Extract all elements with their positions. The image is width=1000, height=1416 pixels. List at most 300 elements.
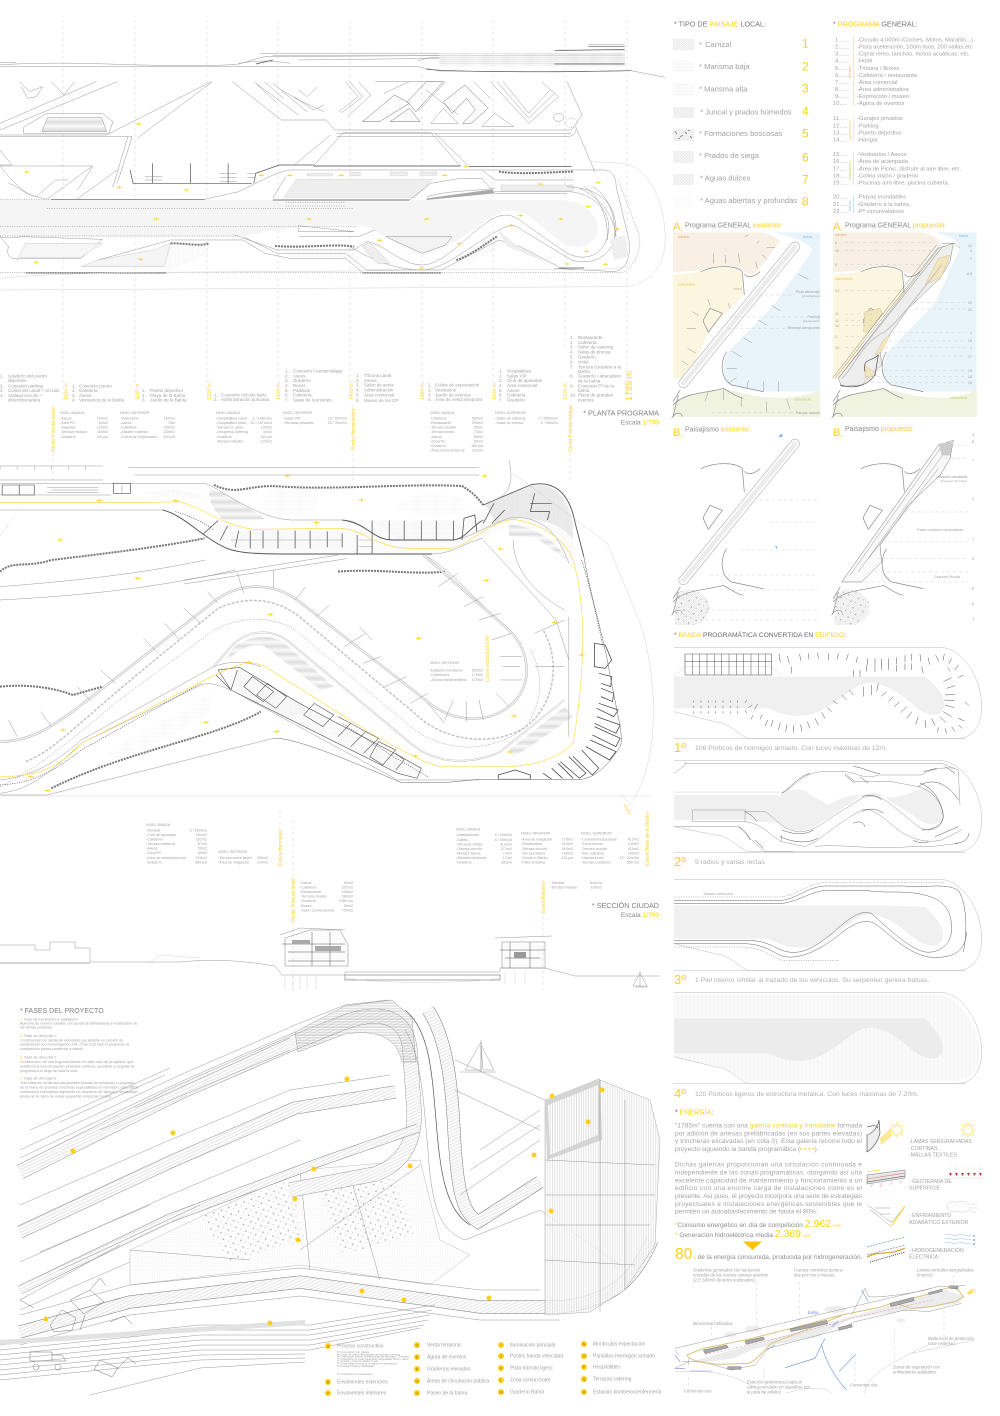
step 2 drawing — [674, 761, 982, 852]
table nivel inferior 5 — [521, 832, 573, 864]
table nivel banda 1: -Área PC — [60, 421, 76, 425]
energy paragraph: excelente capacidad de mantenimiento y funcionamiento a un — [675, 1178, 862, 1184]
table nivel banda 4: -Aseos — [146, 847, 158, 851]
programme items: -Vestuarios / Aseos — [857, 152, 907, 158]
list km 1000: Graderío del puerto — [8, 374, 48, 378]
table nivel banda 2: -Hospitalities pista — [216, 421, 247, 425]
legend column 3: Postes banda velocidad — [510, 1354, 563, 1360]
programme numbers: 8....... — [835, 87, 850, 93]
phases list: 4. Fase de obra ligera: — [20, 1077, 57, 1081]
energy paragraph — [675, 1122, 863, 1216]
table nivel banda 1: -Graderío — [60, 435, 76, 439]
list km 1100 — [135, 384, 187, 402]
step 3 caption — [674, 972, 929, 987]
list km 1400: 1400 m — [349, 383, 355, 400]
A2 labels: 17 — [968, 355, 972, 359]
A1 labels: suburbano — [678, 282, 695, 286]
A2 labels: bahía — [959, 234, 969, 238]
outer edges — [0, 473, 653, 807]
programme numbers: 15..... — [833, 152, 848, 158]
list km 1000: Colina del canal + circuito — [8, 388, 60, 393]
A1 heading: A — [673, 221, 681, 233]
yellow arrow — [743, 1242, 762, 1250]
legend column 3: Graderío Bahía — [510, 1390, 544, 1396]
table nivel banda 5: 273m2 — [501, 847, 512, 851]
legend column 3: J — [500, 1354, 502, 1358]
programme items: -Parking — [857, 124, 879, 130]
programme numbers: 12..... — [833, 124, 848, 130]
B2 labels: Cinturón Pluvial — [934, 575, 960, 579]
B2 labels: (línea con dip hiker) — [941, 479, 967, 483]
energy paragraph: presente. Así pues, el proyecto incorpora una serie de estrategias — [675, 1193, 863, 1200]
list km 1700: 8. — [570, 374, 574, 378]
B2 labels — [917, 432, 975, 621]
table nivel banda 3: -Terraza bahía — [430, 430, 455, 434]
legend column 1: A — [327, 1344, 330, 1348]
list km 1600: Área comercial — [507, 382, 537, 388]
step 1 drawing — [674, 647, 982, 738]
table tribuna sport: 50m2 — [344, 904, 353, 908]
list km 1700: Restaurante — [578, 335, 603, 340]
right end cells — [498, 643, 620, 779]
energy section — [675, 1108, 984, 1263]
list km 1500: 3. — [428, 392, 432, 398]
list km 1400: Museo de los GP — [364, 398, 399, 403]
table nivel inferior 1: -Vestuarios — [120, 416, 139, 420]
80 percent: 80% de la energía consumida, producida por hidrogeneración. — [675, 1246, 863, 1263]
strategy labels: ADIABÁTICO EXTERIOR — [909, 1219, 969, 1226]
table nivel inferior 1: 200m2 — [164, 426, 175, 430]
panel B1 existing landscape — [672, 426, 817, 625]
legend column 2: Graderíos elevados — [427, 1366, 471, 1372]
list km 1600: 6. — [499, 392, 503, 398]
table nivel inferior 5: 196m2 — [562, 851, 573, 855]
landscape labels: * Aguas dulces — [700, 174, 750, 182]
table nivel banda 5: -Graderío — [456, 860, 472, 864]
site plan labels: Graderíos generados con las tierras — [693, 1268, 760, 1272]
table nivel banda 2: 40m2 — [263, 430, 272, 434]
list km 1600: Club de apuestas — [507, 378, 543, 383]
bottom stripes and track — [0, 1305, 435, 1395]
legend column 2: F — [416, 1366, 419, 1372]
list km 1400: 1. — [356, 373, 360, 378]
panel A2 proposed programme — [832, 221, 977, 418]
table nivel banda 5: 9 / 33m2/u — [495, 833, 512, 837]
programme items: -Canal remo, lanchas, motos acuáticas, etc. — [857, 52, 970, 58]
ribbon lower — [20, 1240, 652, 1345]
table nivel banda 3: 132m2 — [472, 449, 483, 453]
table nivel banda 2: -Terraza mirador — [216, 439, 244, 443]
energy paragraph: "1785m" cuenta con una galería continua y transitable formada — [675, 1122, 862, 1130]
table nivel superior 3: 2 / 45m2/u — [541, 421, 558, 425]
table nivel banda 5: -Terrazas Suites — [456, 842, 483, 846]
phases list: las tierras extraídas. — [20, 1026, 53, 1030]
zone names vertical lower: Curva Hotel de la Bahía — [645, 813, 651, 866]
programme items: -Tribuna / Boxes — [857, 66, 899, 72]
band step 3 skin — [674, 879, 982, 987]
A2 labels: 15 — [835, 346, 839, 350]
list km 1700: Graderío — [578, 354, 596, 360]
landscape numbers: 3 — [802, 82, 809, 96]
list km 1700: Salas de prensa — [578, 350, 611, 354]
legend column 3: L — [500, 1378, 503, 1382]
legend column 4: Q — [582, 1376, 586, 1382]
callout markers — [44, 1076, 604, 1326]
list km 1000 second: 1. — [72, 384, 76, 388]
table nivel banda 5: -Mirador Bahía — [456, 851, 481, 855]
B1 heading: 1 — [680, 433, 683, 438]
list km 1100: Puerto deportivo — [150, 388, 184, 393]
table nivel inferior 5: -Pista la Bahía — [521, 860, 546, 864]
table nivel banda 4: 261m2 — [196, 838, 207, 842]
A1 labels — [678, 235, 820, 415]
table nivel banda 5: 322pw — [501, 860, 512, 864]
elevation strip — [0, 45, 665, 77]
list km 1300: 1300 m — [276, 383, 282, 400]
landscape labels: * Formaciones boscosas — [699, 129, 782, 138]
table nivel inferior 1: NIVEL INFERIOR — [120, 411, 149, 415]
track curves — [0, 170, 629, 272]
table nivel banda 5: -Almacén limpieza — [456, 856, 487, 860]
city blocks — [0, 82, 582, 138]
landscape numbers: 5 — [802, 126, 809, 140]
list km 1000 second: 1000 m — [64, 383, 70, 400]
legend column 1: C — [327, 1390, 330, 1396]
legend column 1: Pº Colocación de losas alveolares alogedadas 35cm+ carpa — [337, 1357, 409, 1361]
step 3 drawing — [674, 879, 982, 970]
A2 labels: 19 — [968, 369, 972, 373]
table nivel banda 4 — [146, 823, 207, 864]
legend column 1: Pº Colocación de envolventes — [337, 1372, 373, 1376]
A1 labels: Parque natural — [796, 411, 820, 415]
B2 labels: 3 — [972, 556, 975, 561]
strategy labels: - GEOTERMIA DE — [909, 1179, 952, 1185]
programme numbers: 3....... — [835, 52, 850, 58]
table nivel banda 4: NIVEL BANDA — [146, 823, 171, 827]
table curva bahaira — [550, 881, 602, 890]
table nivel inferior 2: -Salas VIP — [283, 416, 301, 420]
ribbon descending — [405, 1010, 620, 1265]
vehicle trace label: Trazado vehículos — [703, 892, 733, 896]
step 4 caption: 120 Pórticos ligeros de estructura metálica. Con luces máximas de 7.20m. — [695, 1091, 919, 1098]
list km 1000 second: 4. — [72, 398, 76, 402]
legend column 1: Pº Cimentación por pilotaje — [337, 1350, 370, 1354]
table nivel banda 5: 73m2 — [503, 851, 512, 855]
programme numbers: 5....... — [835, 66, 850, 72]
icon: evaporative cooling — [868, 1201, 978, 1226]
landscape numbers: 1 — [802, 36, 809, 50]
level markers — [28, 474, 585, 792]
loop programme table: 620m2 — [472, 668, 483, 672]
table nivel banda 4: 218m2 — [196, 856, 207, 860]
list km 1400: 6. — [356, 398, 360, 403]
table nivel superior 3: -Salas de prensa — [495, 421, 524, 425]
total length 1785 m: 1785 m — [624, 371, 634, 401]
landscape labels — [699, 40, 797, 205]
legend column 3: K — [500, 1366, 503, 1370]
B1 heading: Paisajismo — [685, 426, 721, 434]
A2 heading: propuesto: — [913, 222, 946, 230]
energy paragraph: independiente de las zonas programáticas, otorgando así una — [675, 1170, 862, 1176]
list km 1700 — [563, 335, 622, 402]
plan: top site plan — [0, 45, 665, 290]
energy paragraph: proyecto siguiendo la banda programática (▪ ▪ ▪ ▪). — [675, 1146, 819, 1153]
A2 labels: 14 — [835, 324, 839, 328]
table curva bahaira: 160m2 — [591, 886, 602, 890]
A2 heading: Programa GENERAL — [845, 222, 913, 230]
table nivel banda 5: NIVEL BANDA — [456, 828, 481, 832]
table nivel banda 5: -Galería circuito — [456, 847, 482, 851]
list km 1500: 2. — [428, 388, 432, 392]
table nivel superior 5: NIVEL SUPERIOR — [581, 832, 612, 836]
B2 labels: 1 — [972, 616, 975, 621]
list km 1400: 5. — [356, 392, 360, 398]
upper programme band — [130, 483, 584, 563]
A2 labels: naturaleza — [950, 396, 968, 400]
B2 heading: 2 — [840, 433, 843, 438]
list km 1000 second: Aseos — [79, 393, 92, 398]
list km 1700: 10. — [570, 392, 576, 398]
B2 map — [832, 440, 968, 615]
list km 1300: Aseos — [293, 374, 306, 378]
programme heading: * PROGRAMA GENERAL: — [833, 20, 918, 28]
programme items: -Área de Picnic, disfrute al aire libre, etc. — [857, 165, 961, 172]
step 2 caption — [674, 854, 765, 869]
A2 heading: A — [833, 221, 841, 233]
B1 vegetation — [675, 500, 817, 625]
list km 1000 second: 2. — [72, 388, 76, 393]
program area tables upper — [51, 405, 574, 453]
building section left — [280, 928, 348, 966]
list km 1600: 5. — [499, 388, 503, 393]
site plan labels: Minicentral hidráulica — [693, 1321, 733, 1326]
table tribuna sport — [300, 881, 353, 912]
step 4 caption — [674, 1086, 919, 1101]
table nivel banda 3: -Graderío — [430, 444, 446, 448]
table nivel superior 3: 2 / 350m2/u — [539, 416, 558, 420]
table nivel banda 1 — [60, 411, 108, 439]
list km 1300: 6. — [285, 392, 289, 398]
table nivel banda 2: 6 / 168m2/u — [253, 416, 272, 420]
legend column 1: Pº Colocación artesas prefabricadas de hormigón. Cimbrado — [337, 1355, 410, 1359]
A2 labels — [835, 233, 972, 400]
right tower facade — [545, 1078, 660, 1315]
plan: detailed programme plan — [0, 460, 653, 807]
table nivel banda 3: 200m2 — [472, 421, 483, 425]
program area tables lower — [146, 813, 651, 922]
banda heading: * BANDA PROGRAMÁTICA CONVERTIDA EN EDIFICIO: — [674, 630, 846, 639]
zone names vertical upper: Curva Fuentemálaga — [568, 405, 574, 452]
list km 1500: Vestuarios — [435, 388, 457, 392]
strategy labels: ELÉCTRICA — [909, 1254, 939, 1260]
energy paragraph: Dichas galerías proporcionan una circulación continuada e — [675, 1162, 862, 1168]
A1 heading: 1 — [680, 227, 683, 232]
phases list: competición con homologación FIA. (Tras esta fase el programa de — [20, 1043, 130, 1047]
list km 1300: 1. — [285, 368, 289, 374]
legend column 3: Iluminación principal — [510, 1342, 555, 1348]
A2 labels: 4 — [970, 249, 972, 253]
phases list: programa a lo largo de toda la vida. — [20, 1069, 78, 1073]
list km 1300: 3. — [285, 378, 289, 383]
phases list: ahora de la mano de varias pequeñas empresas locales. — [20, 1094, 113, 1098]
strategy labels: -CORTINAS — [909, 1146, 938, 1152]
list km 1000: 3. — [0, 388, 4, 393]
panel B2 proposed landscape — [832, 426, 975, 625]
zone names vertical lower: Recta Tribuna sport — [291, 878, 297, 922]
landscape type list — [673, 20, 809, 208]
table nivel banda 1: 110m2 — [97, 430, 108, 434]
list km 1000 second: 3. — [72, 393, 76, 398]
loop programme table: Curva velocidad 180º — [485, 634, 491, 682]
legend column 1: Pº Losas de pilas prefabricadas de hormigón armado — [337, 1352, 401, 1356]
table nivel inferior 4: 130m2 — [257, 860, 268, 864]
table tribuna sport: -Aseos — [300, 881, 312, 885]
building section right — [495, 936, 552, 968]
sailboat in section — [633, 971, 648, 987]
list km 1700: 2. — [570, 340, 574, 345]
table nivel inferior 1: -Alquiler material — [120, 430, 148, 434]
list km 1100: 3. — [142, 398, 146, 402]
list km 1000 second: Vestuarios de la Bahía — [79, 398, 125, 402]
site plan labels: Lamas verticales serigrafiadas — [917, 1268, 974, 1272]
table nivel inferior 5: 175m2 — [562, 838, 573, 842]
table nivel banda 4: 560 pw — [195, 860, 207, 864]
band step 2 radii — [674, 761, 982, 869]
legend column 3: I — [500, 1342, 502, 1348]
site plan labels: Corrientes ríos — [850, 1382, 877, 1388]
energy paragraph: permiten un autoabastecimiento de hasta el 80%: — [675, 1209, 818, 1216]
programme items: -Área administrativa — [857, 86, 909, 93]
phases list: 1. Fase de excavación y paisajismo: — [20, 1018, 79, 1022]
table nivel banda 3: -Cafetería — [430, 416, 447, 420]
list km 1000: 4. — [0, 393, 4, 398]
landscape labels: * Prados de siega — [699, 151, 760, 160]
list km 1300: Graderío — [293, 378, 311, 383]
category bars: naturaleza — [847, 161, 852, 180]
step 2 caption: 5 radios y varias rectas — [695, 859, 765, 866]
radial ticks — [9, 570, 565, 737]
list km 1700: Hotel — [578, 360, 589, 364]
list km 1600: 1600 m — [492, 383, 498, 400]
table nivel banda 4: 3 / 65m2/u — [190, 828, 207, 832]
list km 1300: 2. — [285, 374, 289, 378]
list km 1700: Bahía — [578, 369, 590, 374]
landscape numbers: 8 — [802, 194, 809, 208]
list km 1700: de la bahía — [578, 378, 601, 384]
strategy labels: -LAMAS SERIGRAFIADAS — [909, 1139, 972, 1145]
table nivel banda 3: -Terraza circuito — [430, 426, 456, 430]
yellow circulation axis — [0, 502, 583, 777]
A2 labels: 20 — [968, 301, 972, 305]
lower parcels — [17, 228, 629, 267]
step 3 caption: 1 Piel interior similar al trazado de los vehículos. Su serpenteo genera bolsas. — [695, 977, 929, 984]
table nivel banda 2: -Hospitalities canal — [216, 416, 247, 420]
table nivel inferior 4 — [218, 850, 268, 864]
programme numbers: 6....... — [835, 73, 850, 79]
B2 labels: Paseo continuo circuvalante — [917, 528, 963, 532]
B2 heading: B — [833, 427, 840, 439]
programme items: -Área de acampada — [857, 158, 909, 165]
A2 labels: 13 — [835, 289, 839, 293]
energy paragraph: proyectuales e instalaciones energéticas sostenibles que le — [675, 1201, 862, 1208]
table nivel banda 3: 73m2 — [474, 430, 483, 434]
zone names vertical lower: Curva Hermitaje — [278, 830, 284, 866]
energy paragraph: y trincheras excavadas (en cota 0). Esta galería recorre todo el — [675, 1138, 863, 1145]
A1 labels: bahía — [803, 235, 813, 239]
table nivel banda 3: 50m2 — [474, 439, 483, 443]
table nivel banda 3: -Restaurante — [430, 421, 451, 425]
table nivel banda 2: NIVEL BANDA — [216, 411, 241, 415]
list km 1600: 4. — [499, 383, 503, 388]
table curva bahaira: -Tiendas — [550, 881, 564, 885]
list km 1000 second — [64, 383, 125, 402]
list km 1200: 1200 m — [207, 383, 213, 400]
programme numbers: 21..... — [833, 202, 848, 208]
landscape labels: * Aguas abiertas y profundas — [700, 196, 797, 205]
step 1 caption: 106 Pórticos de hormigón armado. Con luces máximas de 12m. — [695, 745, 887, 752]
table tribuna sport: 3160 pw — [339, 899, 353, 903]
table nivel inferior 2: 16 / 30m2/u — [328, 421, 347, 425]
table nivel inferior 4: 250m2 — [257, 856, 268, 860]
legend column 3: Zona común hotel — [510, 1378, 550, 1384]
list km 1000: desembocadura — [8, 398, 41, 402]
legend column 1: Pº Capado chapa multipliegado — [337, 1364, 375, 1368]
A1 labels: (Aeropuerto) — [803, 319, 820, 323]
step 2 caption: 2º — [674, 854, 686, 869]
site plan labels: calor acumulado en superficie por — [747, 1384, 810, 1390]
sailboat — [460, 1040, 496, 1072]
list km 1200: Administración portuaria — [221, 397, 270, 402]
table nivel banda 5 — [456, 828, 512, 864]
programme numbers: 10..... — [833, 101, 848, 107]
table nivel superior 5: 415m2 — [628, 838, 639, 842]
programme numbers: 17..... — [833, 166, 848, 172]
B2 labels: Mirador inundable — [937, 475, 967, 479]
phases list: competición podría comenzar a darse). — [20, 1047, 84, 1051]
table tribuna sport: 235m2 — [342, 890, 353, 894]
programme numbers: 9....... — [835, 94, 850, 100]
table nivel inferior 2 — [283, 411, 347, 425]
isometric perspective — [0, 1000, 660, 1395]
list km 1000: 2. — [0, 384, 4, 388]
B2 labels: 2 — [972, 496, 975, 501]
legend column 4: Hospitalities — [593, 1364, 620, 1370]
list km 1400 — [349, 373, 399, 403]
programme items: -Área comercial — [857, 79, 898, 86]
A2 labels: 21 — [968, 244, 972, 248]
site plan labels: das por ríos y mareas — [794, 1272, 834, 1278]
zone names vertical upper: Recta Hospitalities — [351, 408, 357, 450]
list km 1500: 1. — [428, 382, 432, 388]
list km 1700: Salón de catering — [578, 344, 614, 350]
heading: planta programa: Escala 1/700 — [621, 420, 659, 426]
landscape numbers: 2 — [802, 60, 809, 74]
ribbon back — [20, 1000, 414, 1190]
phases text — [20, 1008, 140, 1098]
heading: seccion ciudad: Escala 1/700 — [621, 912, 659, 919]
site plan labels: Corrientes ríos — [684, 1388, 711, 1394]
central runway strip — [0, 199, 598, 273]
A1 labels: naturaleza — [794, 398, 812, 402]
B2 labels: 4 — [972, 432, 975, 437]
programme numbers: 2....... — [835, 45, 850, 51]
legend column 2 — [414, 1342, 489, 1396]
programme items: -Circuito 4.000m (Coches, Motos, Maratón...) — [857, 38, 973, 44]
phases list — [20, 1018, 140, 1098]
list km 1600: Salas VIP — [507, 374, 527, 378]
list km 1700: 3. — [570, 344, 574, 350]
table nivel inferior 1: 150m2 — [164, 430, 175, 434]
